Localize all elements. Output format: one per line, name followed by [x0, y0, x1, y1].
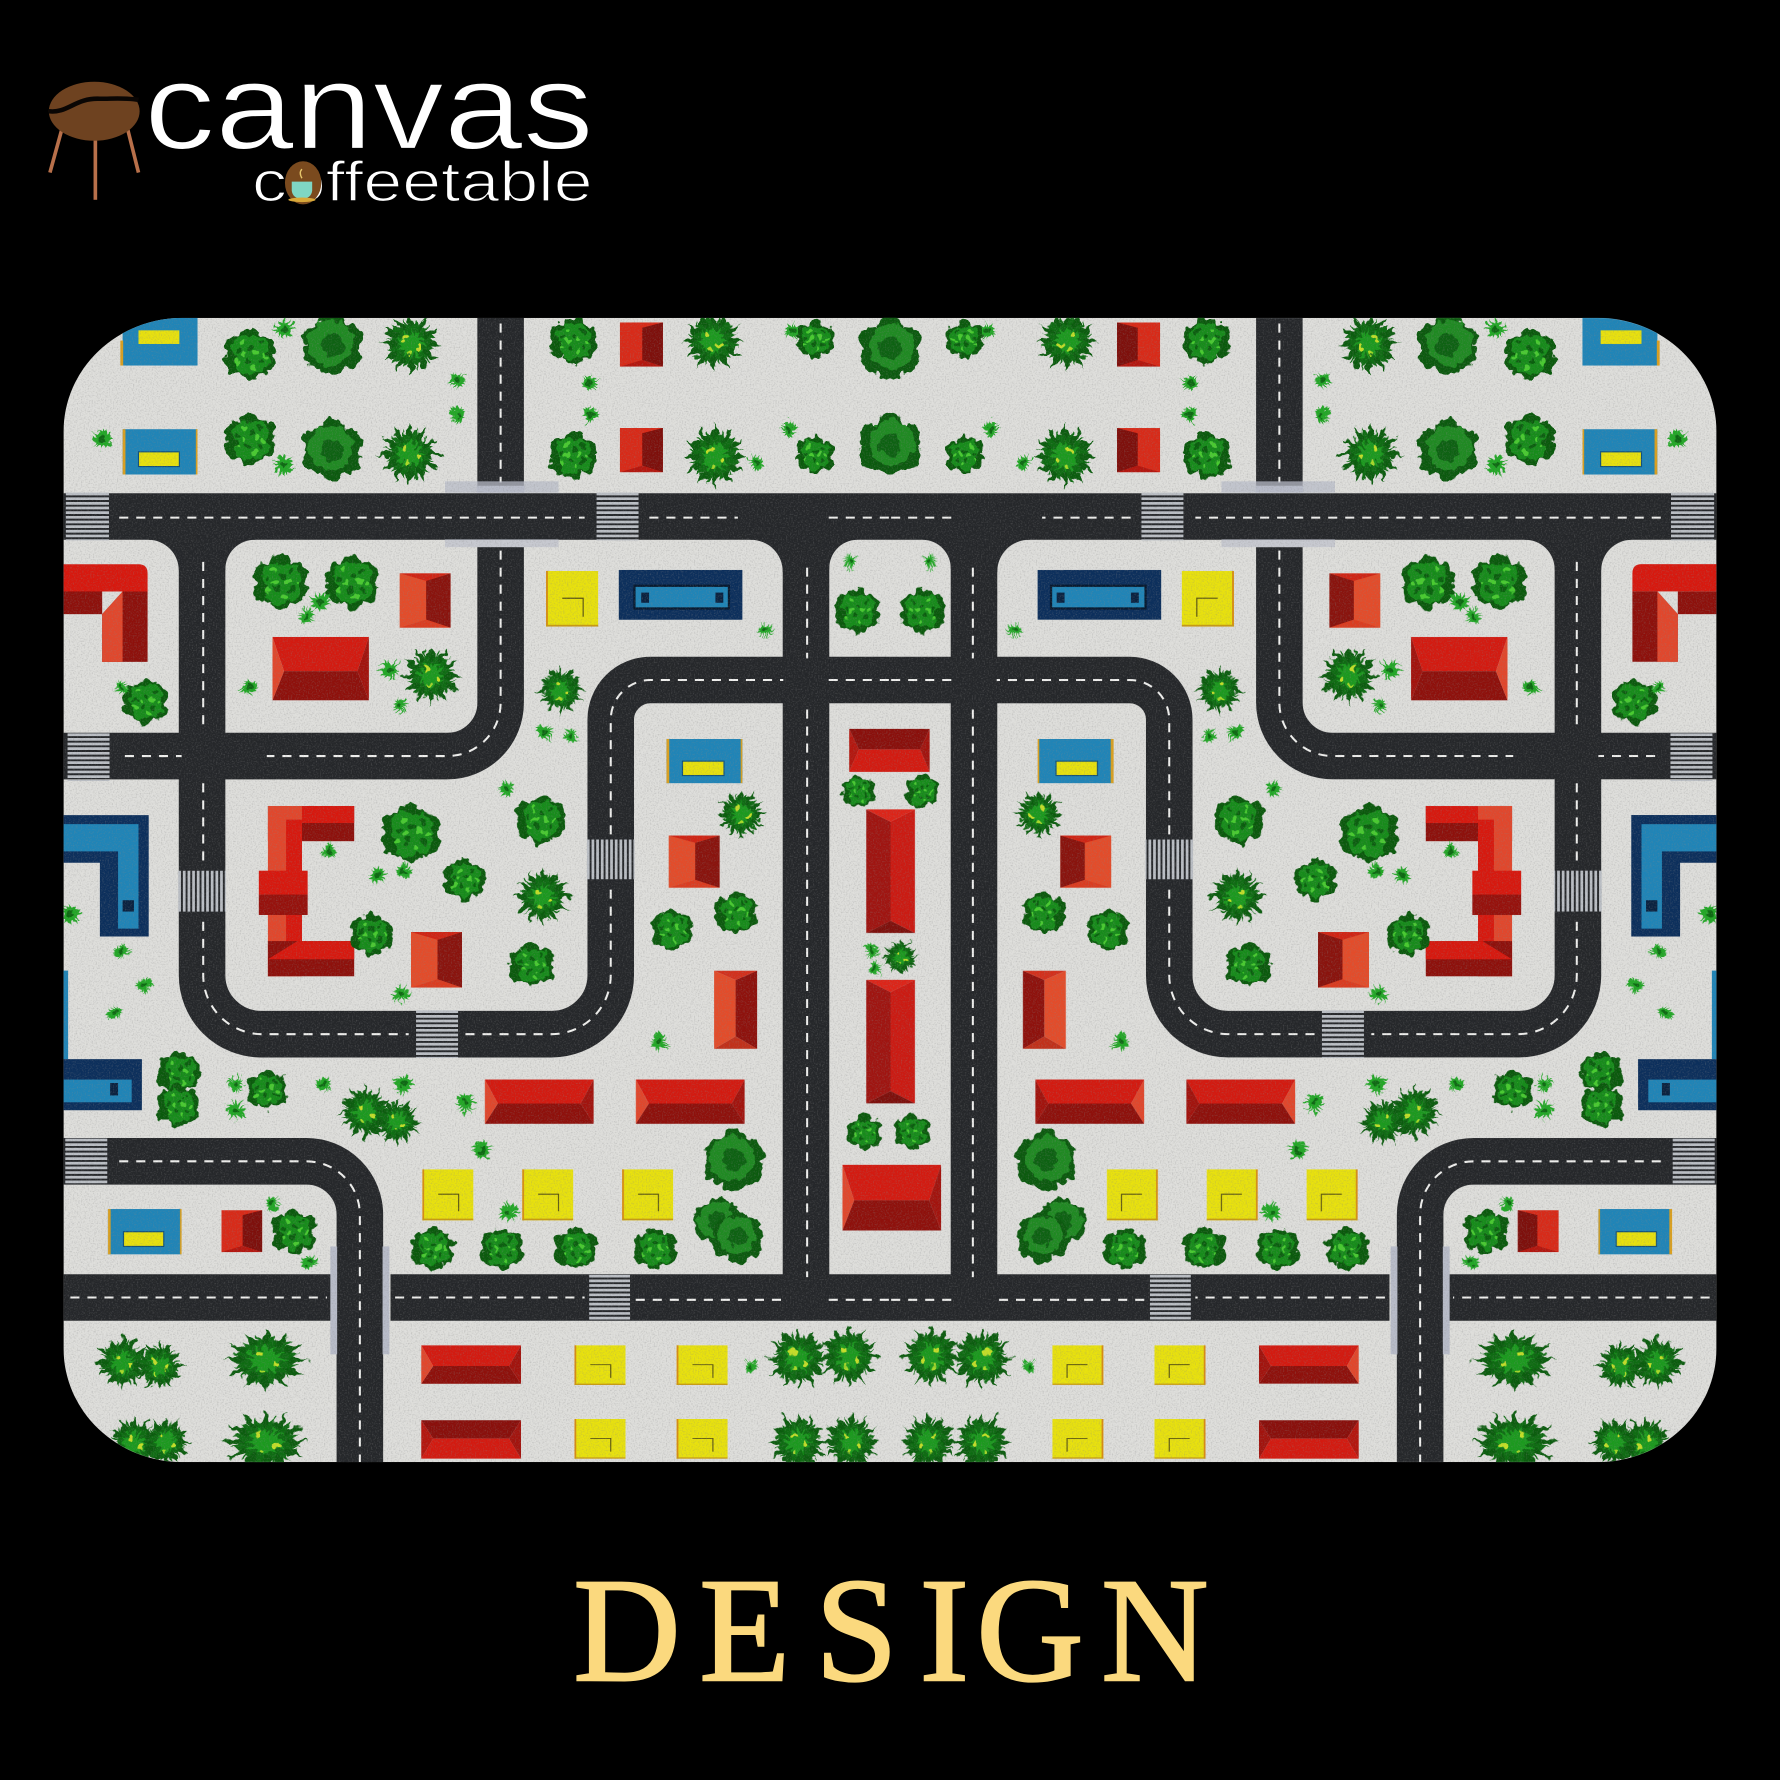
building: orange box inside loop: [411, 932, 462, 988]
title: DESIGN: DESIGN: [573, 1548, 1209, 1713]
buildings: centre-left column: [666, 739, 757, 1049]
buildings: lower block: [422, 1080, 745, 1220]
wordmark: canvas: canvas: [144, 38, 594, 175]
mat surface: [64, 318, 1716, 1462]
building: E-shaped red roof: [259, 806, 354, 976]
trees: left margin: [59, 902, 494, 1161]
fabric texture: [64, 318, 1716, 1462]
logo: [49, 38, 594, 214]
trees: lower block: [412, 1130, 764, 1270]
trees: centre strip: [842, 775, 938, 1150]
buildings: far-left blue: [64, 971, 142, 1110]
icon: coffee bean table: [49, 82, 140, 200]
trees: inside loop: [321, 780, 572, 1005]
buildings: top row: [120, 318, 663, 475]
wordmark: coffeetable: coffeetable: [252, 151, 593, 214]
buildings: bottom-left pocket: [108, 1209, 262, 1254]
road corner fillets: [149, 538, 857, 572]
panel: city map play mat: [59, 309, 1721, 1474]
roads: [64, 318, 890, 1462]
buildings: centre strip: [842, 729, 941, 1231]
left half of the map: [59, 309, 920, 1474]
icon: coffee cup: [285, 161, 321, 204]
crosswalks: [86, 493, 635, 1321]
road centre dashes: [70, 324, 890, 1462]
buildings: upper block: [272, 570, 742, 700]
trees: upper block: [114, 553, 879, 744]
building: blue L-shaped roof: [64, 815, 149, 937]
trees: centre-left column: [649, 789, 766, 1052]
trees: bottom-left pocket: [264, 1195, 318, 1271]
mirrored right half of the map: [860, 309, 1721, 1474]
trees: bottom row: [94, 1325, 881, 1474]
buildings: bottom row: [421, 1345, 728, 1459]
bridges: [330, 481, 559, 1354]
trees: top row: [91, 309, 920, 489]
building: L-shaped red roof: [64, 564, 148, 662]
